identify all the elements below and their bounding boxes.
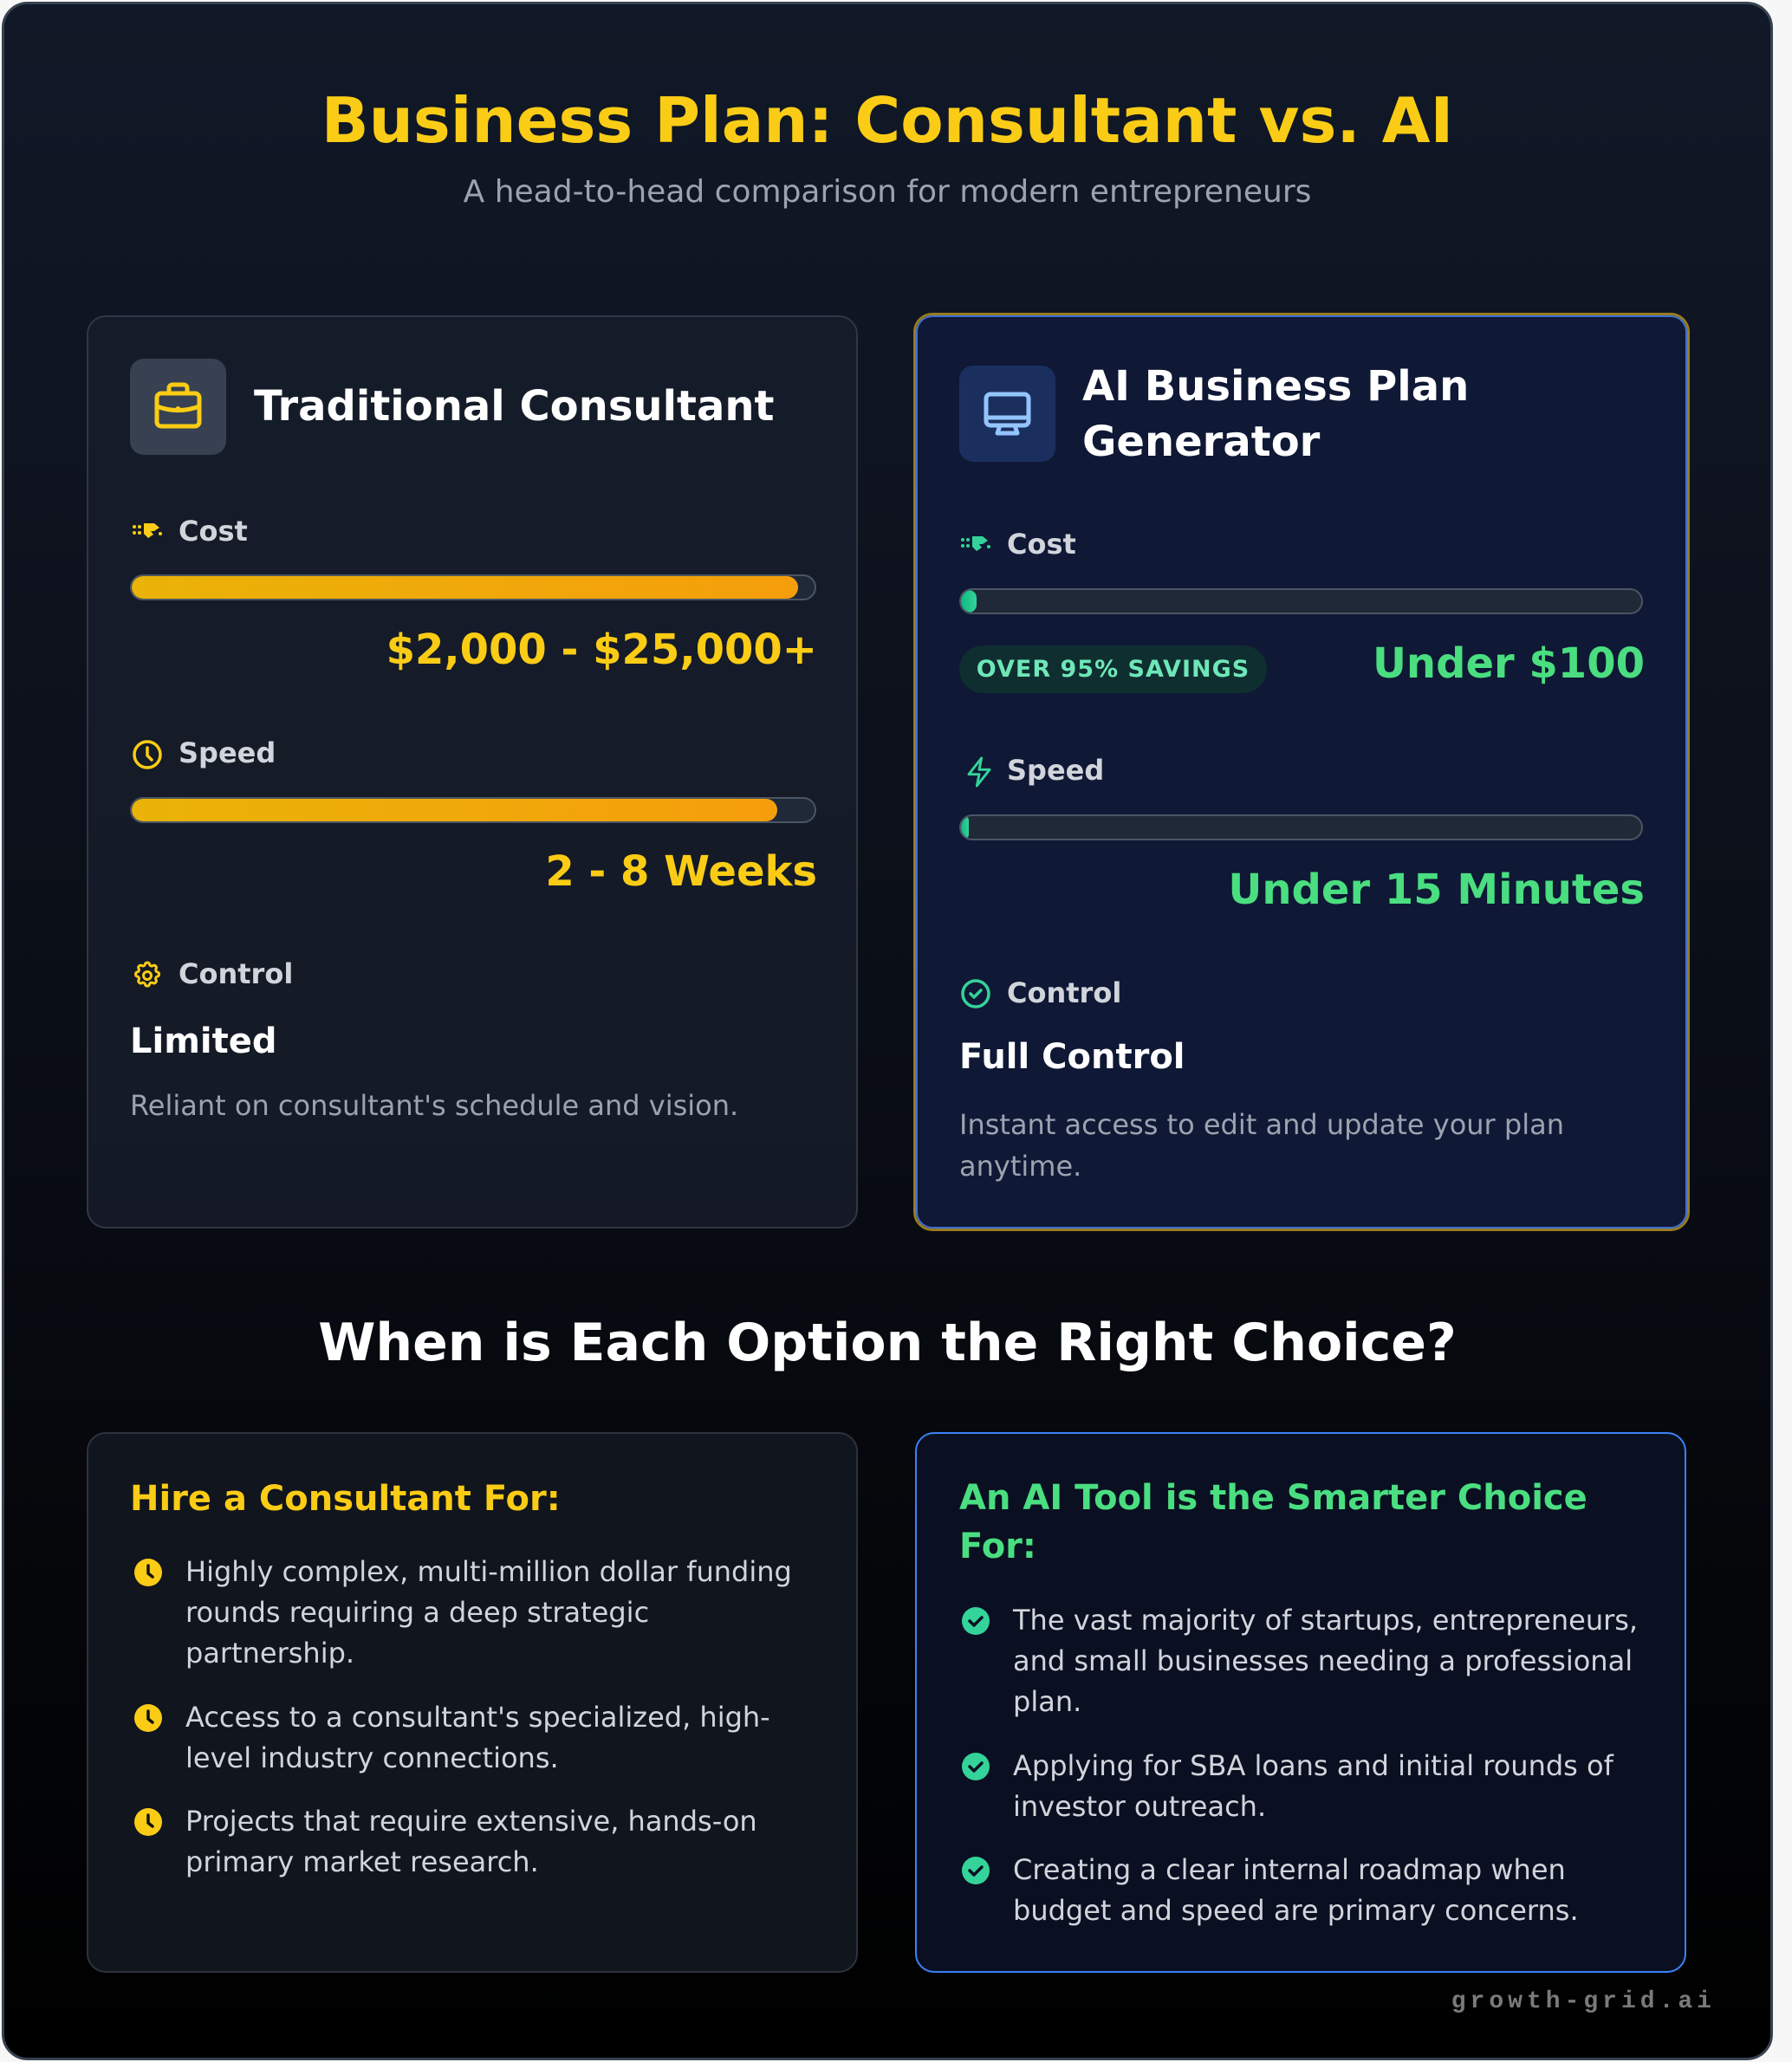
icon: gear bbox=[134, 962, 161, 988]
bar: consultant speed bbox=[130, 797, 816, 823]
icon: clock bbox=[133, 740, 162, 769]
heading: ai tool bbox=[959, 1478, 1587, 1566]
label: control: Control bbox=[179, 957, 293, 990]
icon: cost green bbox=[961, 536, 990, 551]
list: consultant uses bbox=[134, 1555, 792, 1878]
bullet 2 bbox=[962, 1749, 1613, 1823]
heading: hire a consultant: Hire a Consultant For: bbox=[130, 1479, 561, 1519]
panel: ai generator bbox=[913, 313, 1690, 1231]
heading: ai tool: For: bbox=[959, 1527, 1036, 1566]
heading: ai tool: An AI Tool is the Smarter Choice bbox=[959, 1478, 1587, 1518]
value: ai speed: Under 15 Minutes bbox=[1228, 866, 1645, 914]
badge: savings bbox=[959, 645, 1267, 693]
icon: lightning bbox=[967, 757, 991, 787]
footer brand: growth-grid.ai bbox=[1451, 1988, 1716, 2015]
bullet 3: Creating a clear internal roadmap when bbox=[1013, 1853, 1566, 1886]
bar: ai speed bbox=[959, 814, 1643, 840]
bullet 1: plan. bbox=[1013, 1685, 1081, 1718]
bar: ai cost bbox=[959, 588, 1643, 614]
label: ai cost: Cost bbox=[1007, 528, 1076, 561]
title: Business Plan: Consultant vs. AI bbox=[321, 84, 1453, 157]
subtitle: A head-to-head comparison for modern entrepreneurs bbox=[464, 174, 1311, 210]
text: full control description: Instant access to edit and update your plan bbox=[959, 1108, 1564, 1141]
bullet 1: partnership. bbox=[185, 1637, 354, 1670]
bullet 2 bbox=[134, 1701, 770, 1774]
left title: Traditional Consultant bbox=[254, 382, 774, 431]
right title: AI Business Plan bbox=[1082, 362, 1469, 411]
value: full control: Full Control bbox=[959, 1037, 1185, 1077]
bullet 1 bbox=[134, 1555, 792, 1670]
icon: monitor bbox=[959, 366, 1055, 462]
bullet 2: level industry connections. bbox=[185, 1741, 559, 1774]
section heading: When is Each Option the Right Choice? bbox=[318, 1313, 1457, 1373]
list: ai uses bbox=[962, 1604, 1638, 1927]
bullet 1: The vast majority of startups, entrepreneurs, bbox=[1013, 1604, 1638, 1637]
right title: Generator bbox=[1082, 418, 1320, 466]
bullet 3 bbox=[134, 1805, 757, 1878]
bullet 1: and small businesses needing a professional bbox=[1013, 1644, 1633, 1677]
bullet 3 bbox=[962, 1853, 1579, 1927]
panel: traditional consultant bbox=[87, 315, 858, 1229]
panel: hire a consultant bbox=[87, 1432, 858, 1973]
label: ai speed: Speed bbox=[1007, 754, 1104, 787]
bar: consultant cost bbox=[130, 574, 816, 600]
value: consultant speed: 2 - 8 Weeks bbox=[545, 847, 817, 896]
bullet 3: primary market research. bbox=[185, 1845, 539, 1878]
bullet 2: Applying for SBA loans and initial rounds of bbox=[1013, 1749, 1613, 1782]
value: limited: Limited bbox=[130, 1021, 276, 1061]
icon: cost bbox=[133, 523, 162, 538]
value: ai cost: Under $100 bbox=[1373, 639, 1645, 688]
label: ai control: Control bbox=[1007, 976, 1121, 1009]
bullet 3: budget and speed are primary concerns. bbox=[1013, 1894, 1579, 1927]
label: speed: Speed bbox=[179, 736, 276, 769]
text: full control description bbox=[959, 1108, 1564, 1183]
bullet 1: Highly complex, multi-million dollar funding bbox=[185, 1555, 792, 1588]
bullet 1: rounds requiring a deep strategic bbox=[185, 1596, 649, 1629]
label: cost: Cost bbox=[179, 515, 248, 548]
icon: briefcase bbox=[130, 359, 226, 455]
icon: check circle bbox=[961, 979, 990, 1008]
text: limited description: Reliant on consultant's schedule and vision. bbox=[130, 1089, 738, 1122]
bullet 3: Projects that require extensive, hands-on bbox=[185, 1805, 757, 1838]
panel: ai tool choice bbox=[915, 1432, 1686, 1973]
right title bbox=[1082, 362, 1469, 466]
badge: savings: OVER 95% SAVINGS bbox=[977, 656, 1250, 683]
bullet 2: Access to a consultant's specialized, high- bbox=[185, 1701, 770, 1734]
value: consultant cost: $2,000 - $25,000+ bbox=[386, 626, 817, 674]
text: full control description: anytime. bbox=[959, 1150, 1081, 1183]
bullet 2: investor outreach. bbox=[1013, 1790, 1266, 1823]
bullet 1 bbox=[962, 1604, 1638, 1718]
